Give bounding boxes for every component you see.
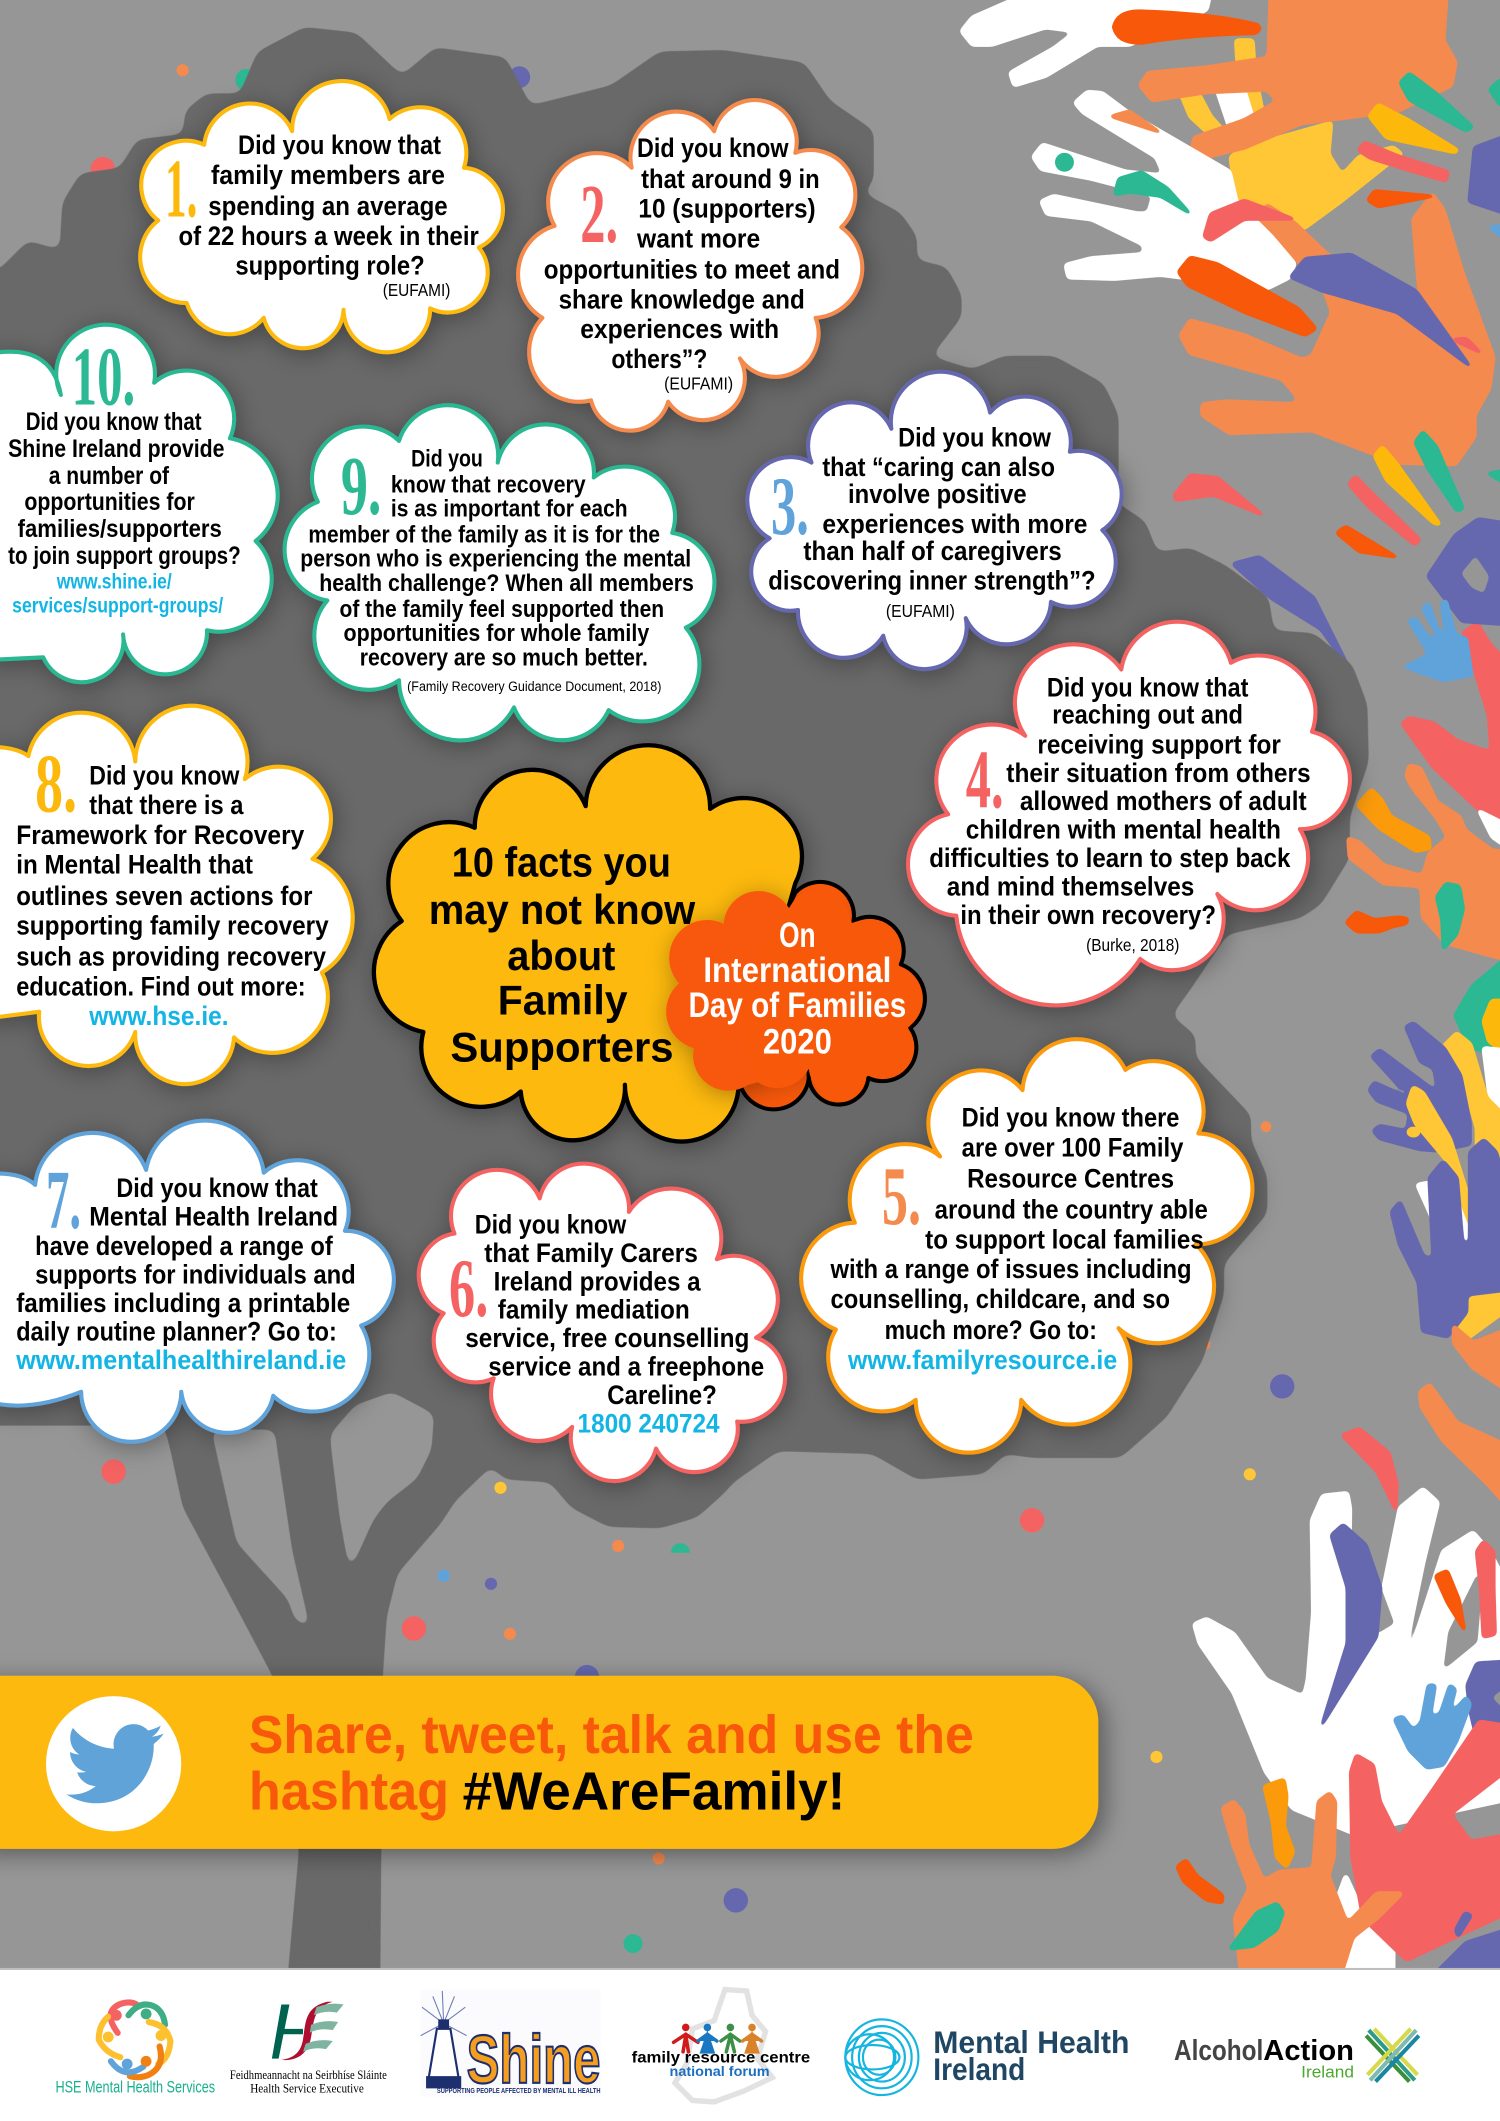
logo: HSE Mental Health Services: HSE Mental Health Services — [55, 2078, 215, 2096]
text: (EUFAMI) — [886, 601, 955, 621]
logo: Shine — [421, 1990, 601, 2098]
text: in Mental Health that — [16, 850, 253, 880]
text: are over 100 Family — [962, 1132, 1183, 1162]
hand: white big — [1194, 1489, 1500, 1833]
text: spending an average — [208, 191, 448, 221]
text — [830, 1103, 1208, 1375]
bubble outline — [0, 706, 353, 1084]
text: daily routine planner? Go to: — [16, 1316, 337, 1346]
cloud 9 — [285, 405, 714, 740]
text: such as providing recovery — [16, 942, 326, 972]
crescent behind tree — [1234, 557, 1347, 665]
logo: family resource centre: national forum — [670, 2064, 770, 2079]
blob: orange-red — [1346, 912, 1408, 932]
text: (EUFAMI) — [383, 280, 450, 300]
text: outlines seven actions for — [16, 881, 313, 911]
text: education. Find out more: — [16, 971, 306, 1001]
text: supports for individuals and — [35, 1260, 356, 1290]
logo: Shine: Shine — [467, 2021, 601, 2098]
text: have developed a range of — [35, 1231, 333, 1261]
text: family mediation — [498, 1295, 690, 1325]
text: Careline? — [607, 1380, 717, 1410]
yellow bubble — [374, 745, 802, 1142]
text: families/supporters — [18, 515, 222, 543]
text: experiences with more — [822, 509, 1087, 539]
text: experiences with — [580, 314, 779, 344]
footer — [0, 1968, 1500, 2121]
bubble outline — [0, 1121, 394, 1442]
text: to support local families — [925, 1224, 1204, 1254]
title text: Supporters — [450, 1024, 674, 1071]
text: Framework for Recovery — [16, 820, 304, 850]
title text — [429, 838, 696, 1071]
text: their situation from others — [1006, 758, 1311, 788]
bubble outline — [801, 1039, 1252, 1453]
number 9: 9. — [341, 440, 381, 533]
text: Did you know — [89, 760, 240, 790]
bubble outline — [908, 622, 1350, 1005]
text — [179, 130, 479, 300]
crescent: coral — [1342, 1428, 1397, 1511]
finger: amber — [1265, 1780, 1293, 1867]
patch: teal — [1229, 1903, 1284, 1949]
logo: Mental Health Ireland: Ireland — [933, 2052, 1025, 2087]
bubble outline — [747, 372, 1122, 669]
cloud 6 — [419, 1164, 785, 1481]
logo: HSE: Health Service Executive — [250, 2081, 364, 2095]
badge text: Day of Families — [688, 986, 906, 1025]
white palm patch — [1217, 202, 1294, 288]
title text: Family — [498, 976, 628, 1023]
text: www.familyresource.ie — [847, 1345, 1117, 1375]
hand: orange — [1223, 1793, 1401, 1988]
hand: white top — [962, 0, 1213, 85]
text: opportunities for whole family — [344, 621, 650, 647]
text: difficulties to learn to step back — [929, 843, 1291, 873]
hand: coral — [1351, 1722, 1500, 1960]
logo: Alcohol Action Ireland: Action — [1263, 2035, 1354, 2067]
text: Ireland provides a — [494, 1266, 701, 1296]
white patches — [1484, 1048, 1500, 1129]
title text: may not know — [429, 886, 696, 933]
logo: Shine: SUPPORTING PEOPLE AFFECTED BY MENTAL ILL HEALTH — [437, 2086, 601, 2095]
accents on top hands — [1055, 73, 1500, 557]
text: Did you know — [637, 133, 789, 163]
text: with a range of issues including — [830, 1254, 1192, 1284]
hand: orange top — [1140, 0, 1455, 157]
ring: purple — [1468, 1661, 1500, 1753]
hands top right — [962, 0, 1500, 557]
streak: orange-red — [1112, 9, 1261, 45]
text: children with mental health — [966, 815, 1281, 845]
cloud 5 — [801, 1039, 1252, 1453]
back outline — [740, 882, 925, 1109]
text: share knowledge and — [559, 284, 805, 314]
text: of the family feel supported then — [339, 597, 664, 623]
bubble outline — [419, 1164, 785, 1481]
badge text: International — [703, 951, 891, 990]
text — [544, 133, 840, 394]
banner text: #WeAreFamily! — [463, 1762, 845, 1822]
hand: orange — [1349, 766, 1500, 963]
number 3: 3. — [771, 460, 809, 553]
hand: white large — [1033, 92, 1294, 288]
text — [300, 447, 694, 695]
text: counselling, childcare, and so — [830, 1284, 1170, 1314]
text: (Family Recovery Guidance Document, 2018) — [407, 679, 661, 695]
text: others”? — [611, 344, 707, 374]
text: families including a printable — [16, 1288, 350, 1318]
bubble outline — [518, 100, 862, 431]
cloud 1 — [140, 81, 503, 352]
logo: Alcohol Action Ireland: Ireland — [1301, 2064, 1354, 2082]
number 8: 8. — [35, 738, 77, 831]
streak: orange-red — [1435, 1570, 1465, 1631]
text: Did you know that — [26, 408, 202, 436]
text: Did you know there — [962, 1103, 1179, 1133]
text: Did you know that — [1047, 673, 1248, 703]
text: a number of — [49, 462, 170, 490]
text: www.hse.ie. — [88, 1001, 229, 1031]
text: that “caring can also — [822, 452, 1055, 482]
number 1: 1. — [165, 142, 197, 235]
text: Mental Health Ireland — [89, 1201, 338, 1231]
logo: family resource centre: family resource centre — [632, 2050, 811, 2067]
text: much more? Go to: — [885, 1315, 1097, 1345]
finger: coral — [1477, 1542, 1495, 1637]
bubble outline — [140, 81, 503, 352]
text: than half of caregivers — [803, 536, 1062, 566]
crescent: purple — [1321, 1524, 1381, 1726]
ring: purple — [1428, 519, 1500, 625]
text: Did you know that — [116, 1173, 318, 1203]
badge patch — [730, 890, 921, 1096]
text — [8, 408, 241, 618]
hand: yellow — [1181, 41, 1401, 230]
text: in their own recovery? — [960, 900, 1216, 930]
text — [929, 673, 1311, 955]
hand: orange large — [1181, 195, 1493, 464]
banner text — [249, 1705, 974, 1822]
text: recovery are so much better. — [360, 645, 648, 671]
cloud 3 — [747, 372, 1122, 669]
streak: amber — [1358, 790, 1430, 851]
number 6: 6. — [449, 1242, 488, 1335]
text — [768, 422, 1096, 621]
white sliver — [1478, 810, 1500, 858]
logo: Alcohol Action Ireland: Alcohol — [1174, 2035, 1263, 2067]
cloud 10 — [0, 325, 278, 682]
text: know that recovery — [391, 472, 586, 498]
text: around the country able — [935, 1195, 1208, 1225]
text: 10 (supporters) — [638, 194, 816, 224]
text: discovering inner strength”? — [768, 566, 1096, 596]
text: reaching out and — [1052, 700, 1243, 730]
hand: purple lower — [1392, 1140, 1500, 1336]
hand: purple upper — [1369, 1023, 1470, 1151]
footer panel — [0, 1969, 1500, 2121]
hands middle right — [1342, 519, 1500, 1522]
text: Did you know that — [238, 130, 441, 160]
text: that around 9 in — [641, 164, 820, 194]
logo: HSE — [230, 2002, 387, 2095]
text — [465, 1210, 764, 1438]
banner text: Share, tweet, talk and use the — [249, 1705, 974, 1765]
orange badge — [666, 882, 925, 1109]
confetti dots — [91, 64, 1294, 1953]
text: to join support groups? — [8, 542, 241, 570]
purple bottom — [1420, 1925, 1500, 1988]
cloud 2 — [518, 100, 862, 431]
badge text: On — [779, 916, 816, 955]
text: (Burke, 2018) — [1086, 935, 1179, 955]
text: Did you — [411, 447, 483, 473]
number 7: 7. — [46, 1154, 81, 1247]
logo: family resource centre — [632, 1990, 811, 2102]
cloud 8 — [0, 706, 353, 1084]
patch: teal and yellow — [1455, 945, 1500, 1062]
hand: white finger — [1216, 87, 1252, 127]
icon: twitter bird — [66, 1724, 164, 1803]
text: supporting family recovery — [16, 911, 329, 941]
hashtag banner — [0, 1676, 1098, 1849]
badge text — [688, 916, 906, 1062]
hand: small blue — [1394, 1685, 1470, 1768]
text: service and a freephone — [488, 1352, 764, 1382]
text: services/support-groups/ — [12, 595, 223, 618]
text: person who is experiencing the mental — [300, 547, 691, 573]
dot: yellow — [1407, 1127, 1420, 1137]
title text: about — [507, 932, 615, 979]
text: is as important for each — [391, 497, 628, 523]
title text: 10 facts you — [452, 838, 671, 885]
number 5: 5. — [882, 1150, 921, 1243]
logo: HSE: Feidhmeannacht na Seirbhíse Sláinte — [230, 2068, 387, 2082]
text: www.mentalhealthireland.ie — [15, 1345, 346, 1375]
text — [16, 760, 329, 1031]
number 4: 4. — [966, 733, 1004, 826]
title cloud — [374, 745, 802, 1142]
bubble outline — [285, 405, 714, 740]
logo: HSE Mental Health Services — [55, 2002, 215, 2096]
text: that Family Carers — [484, 1238, 698, 1268]
hand: blue — [1405, 601, 1472, 680]
text: Resource Centres — [967, 1164, 1174, 1194]
text: www.shine.ie/ — [56, 570, 172, 593]
text: 1800 240724 — [578, 1408, 720, 1438]
text: Shine Ireland provide — [8, 435, 225, 463]
cloud 4 — [908, 622, 1350, 1005]
banner text: hashtag — [249, 1762, 449, 1822]
text: opportunities to meet and — [544, 255, 840, 285]
logo: Mental Health Ireland: Mental Health — [933, 2025, 1129, 2060]
badge text: 2020 — [763, 1023, 832, 1062]
front bubble — [666, 891, 866, 1091]
text: supporting role? — [235, 251, 425, 281]
banner panel — [0, 1676, 1098, 1849]
text: receiving support for — [1037, 729, 1281, 759]
white strip — [1332, 1876, 1393, 1988]
text: service, free counselling — [465, 1323, 749, 1353]
text: Did you know — [475, 1210, 627, 1240]
text: health challenge? When all members — [319, 571, 694, 597]
text: (EUFAMI) — [664, 374, 733, 394]
hands bottom right — [1177, 1489, 1500, 1988]
patch: teal — [1436, 883, 1463, 949]
blob: orange-red — [1177, 1860, 1223, 1903]
text: opportunities for — [24, 488, 195, 516]
text: involve positive — [848, 479, 1027, 509]
text: that there is a — [89, 790, 244, 820]
bubble outline — [0, 325, 278, 682]
hand: yellow — [1443, 1033, 1500, 1339]
text: allowed mothers of adult — [1020, 786, 1307, 816]
hand: yellow finger — [1408, 1087, 1477, 1231]
logo: Alcohol Action Ireland — [1174, 2029, 1419, 2082]
icon: twitter circle — [46, 1696, 181, 1831]
cloud 7 — [0, 1121, 394, 1442]
streak: orange — [1454, 1324, 1500, 1400]
number 2: 2. — [580, 168, 618, 261]
text: Did you know — [898, 422, 1051, 452]
hand: coral — [1403, 624, 1500, 845]
number 10: 10. — [72, 330, 135, 423]
text — [15, 1173, 356, 1375]
text: family members are — [211, 160, 445, 190]
text: and mind themselves — [947, 871, 1194, 901]
logo: Mental Health Ireland — [845, 2019, 1129, 2095]
text: member of the family as it is for the — [308, 522, 660, 548]
text: of 22 hours a week in their — [179, 221, 479, 251]
text: want more — [636, 224, 760, 254]
